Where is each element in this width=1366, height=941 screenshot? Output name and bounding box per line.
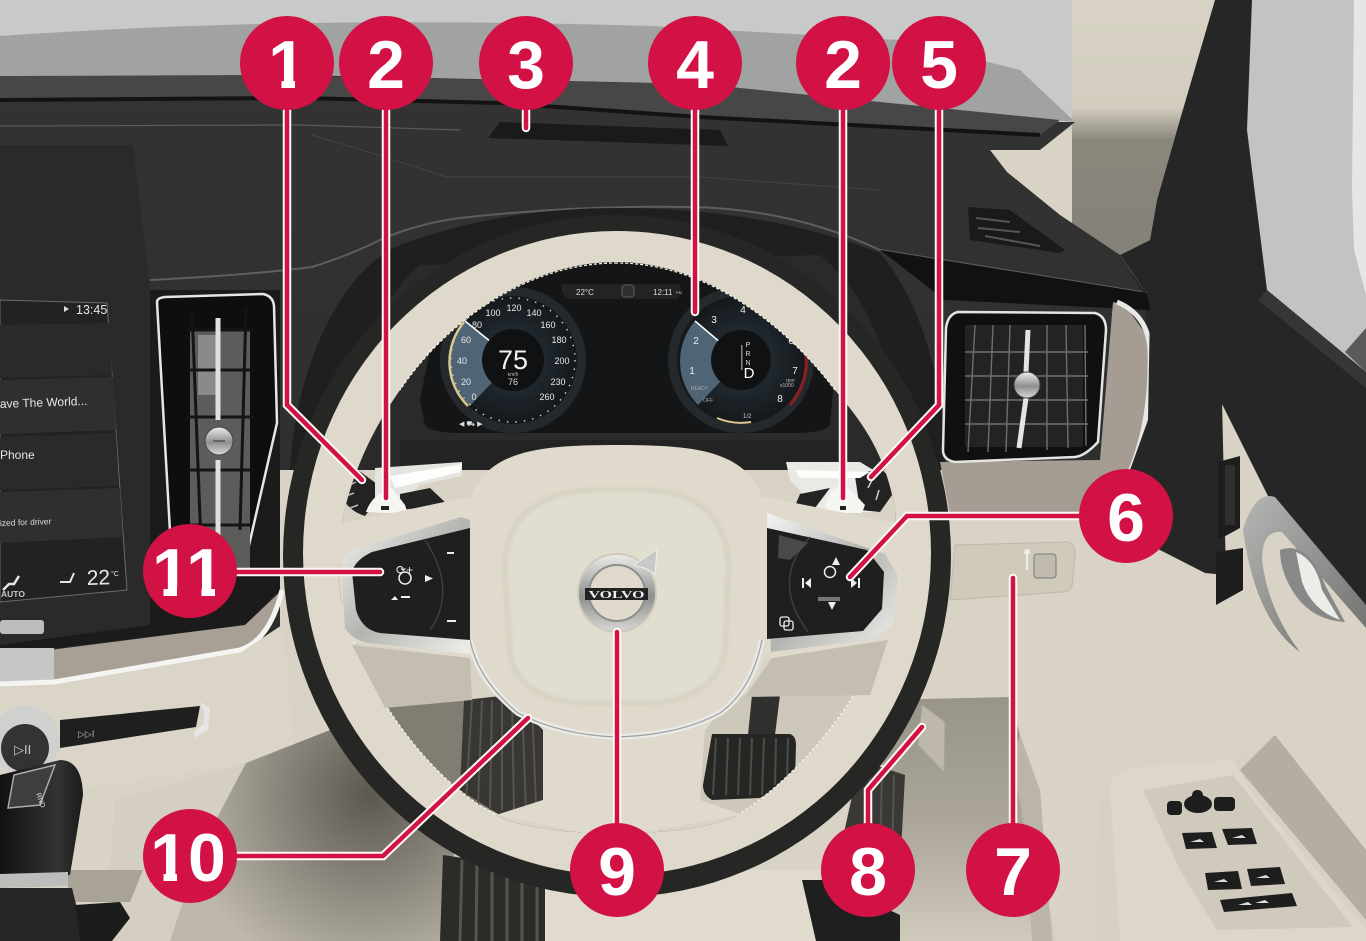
speedometer: 180: [551, 335, 567, 345]
floor mat: [440, 855, 545, 941]
callout 11: 11: [152, 535, 224, 611]
window switch panel: [1110, 735, 1366, 941]
door dark panel next to dash: [1118, 253, 1226, 576]
stalk right: wipers: [786, 462, 892, 513]
lower console beige: [0, 625, 295, 800]
speedometer: 260: [539, 392, 555, 402]
door handle: [1243, 496, 1366, 652]
left footrest: [460, 695, 545, 815]
speedometer: 20: [461, 377, 471, 387]
right control pad: [767, 513, 898, 652]
callout 7: 7: [994, 834, 1032, 910]
dashboard upper dark panel: [0, 75, 1150, 660]
instrument cluster: [340, 255, 900, 470]
callout 4: [648, 16, 742, 110]
right dash top edge: [880, 250, 1150, 310]
callout 8: [821, 823, 915, 917]
infotainment screen: Phone: [0, 448, 35, 462]
callout 11: [143, 524, 237, 618]
lower floor under wheel: [540, 870, 820, 941]
speedometer: 40: [457, 356, 467, 366]
speedometer: 80: [472, 320, 482, 330]
callout 10: 10: [150, 820, 226, 896]
speedometer: 100: [485, 308, 501, 318]
callout 5: 5: [920, 27, 958, 103]
dash vent on top right: [968, 207, 1065, 253]
speedometer: 0: [471, 392, 477, 402]
callout 2 left: [339, 16, 433, 110]
callout 4: 4: [676, 27, 714, 103]
pedal base: [802, 880, 900, 941]
speedometer: 75: [498, 345, 528, 375]
right air vent: [943, 312, 1106, 462]
infotainment screen: 13:45: [76, 303, 107, 317]
callout 10: [143, 809, 237, 903]
cluster status bar: 12:11: [653, 288, 673, 297]
steering wheel rim: [283, 215, 951, 897]
callout 1: [240, 16, 334, 110]
shelf behind gear boot: [68, 870, 143, 902]
foot plate by pedal: [918, 705, 945, 772]
callout 1: 1: [268, 27, 306, 103]
windshield: [0, 0, 1080, 130]
media knob: [0, 706, 60, 776]
cluster status bar: 22°C: [576, 288, 594, 297]
tachometer: 5: [770, 314, 776, 325]
media button strip: ▷▷I: [78, 729, 94, 739]
callout 7: [966, 823, 1060, 917]
callout 2 left: 2: [367, 27, 405, 103]
media knob: ▷II: [14, 742, 31, 757]
tachometer: D: [744, 365, 755, 382]
accelerator pedal arm: [838, 760, 905, 870]
infotainment screen: AUTO: [1, 589, 25, 599]
infotainment screen: ized for driver: [0, 516, 52, 528]
left footwell floor: [135, 700, 470, 941]
door speaker: [1100, 310, 1225, 575]
speedometer: 140: [526, 308, 542, 318]
tachometer: rpm: [786, 378, 795, 384]
callout 6: 6: [1107, 480, 1145, 556]
tachometer: 7: [792, 366, 798, 377]
tachometer: 3: [711, 315, 717, 326]
callout 9: [570, 823, 664, 917]
right footwell: [880, 697, 1055, 941]
cluster status bar: PM: [676, 290, 682, 295]
tachometer: 1: [689, 366, 695, 377]
Volvo logo: VOLVO: [588, 590, 644, 601]
steering wheel hub and spokes: [335, 445, 905, 838]
hole floor shading right: [700, 695, 880, 815]
callout 5: [892, 16, 986, 110]
tachometer: N: [745, 360, 751, 367]
lower-left light floor: [105, 763, 246, 941]
speedometer: 76: [508, 377, 518, 387]
speedometer: 60: [461, 335, 471, 345]
taupe trim around right vent: [940, 302, 1150, 514]
lower dashboard right beige: [890, 514, 1366, 941]
left control pad: ⟳+: [396, 563, 413, 577]
speedometer: 230: [550, 377, 566, 387]
side window and door seal: [1120, 0, 1366, 620]
tachometer: P: [746, 342, 751, 349]
door upper dark band: [1216, 300, 1366, 605]
dashboard hood behind wheel: [290, 208, 945, 470]
A-pillar: [1072, 0, 1215, 255]
left console taupe and chrome trim: [0, 590, 282, 684]
floor vent strip: [1012, 735, 1052, 941]
infotainment screen: ave The World...: [0, 394, 88, 411]
callout leader lines outline: [190, 63, 1126, 870]
left control pad: [341, 517, 470, 654]
callout 2 right: 2: [824, 27, 862, 103]
callout 6: [1079, 469, 1173, 563]
tachometer: 4: [740, 305, 746, 316]
callout 9: 9: [598, 834, 636, 910]
callout 3: 3: [507, 27, 545, 103]
callout 8: 8: [849, 834, 887, 910]
gear lever: [0, 760, 130, 941]
speedometer: 200: [554, 356, 570, 366]
speedometer: ◀ ⛟ ▶: [459, 421, 483, 428]
tachometer: 8: [777, 394, 783, 405]
callout 3: [479, 16, 573, 110]
tachometer: OFF: [703, 398, 713, 404]
brake pedal: [703, 695, 796, 800]
centre stack dark panel: [0, 290, 280, 655]
speedometer: 160: [540, 320, 556, 330]
tachometer: READY: [691, 386, 709, 392]
tachometer: 1/2: [743, 414, 752, 420]
left air vent: [157, 294, 277, 570]
head-up display slot: [488, 122, 728, 146]
tachometer: x1000: [780, 383, 794, 389]
speedometer: km/h: [508, 372, 519, 378]
door lower trim: [1095, 735, 1366, 941]
cluster status bar: [562, 284, 682, 299]
tachometer: 2: [693, 336, 699, 347]
callout 2 right: [796, 16, 890, 110]
infotainment screen: 22: [86, 566, 111, 590]
Volvo logo: [578, 549, 657, 632]
speedometer: [440, 287, 586, 433]
tachometer: 6: [788, 336, 794, 347]
ignition panel: [950, 542, 1075, 600]
tachometer: R: [745, 351, 751, 358]
media button strip: [60, 702, 210, 748]
hole floor shading left: [385, 700, 500, 815]
infotainment screen: [0, 300, 127, 602]
stalk left: lights: [338, 462, 462, 516]
gear lever: RND: [34, 792, 46, 809]
centre screen surround: [0, 145, 150, 655]
dashboard top band and seams: [0, 76, 1147, 293]
speedometer: 120: [506, 303, 522, 313]
tachometer: [668, 287, 814, 433]
callout leader lines crimson: [190, 63, 1126, 870]
infotainment screen: °C: [111, 570, 119, 578]
